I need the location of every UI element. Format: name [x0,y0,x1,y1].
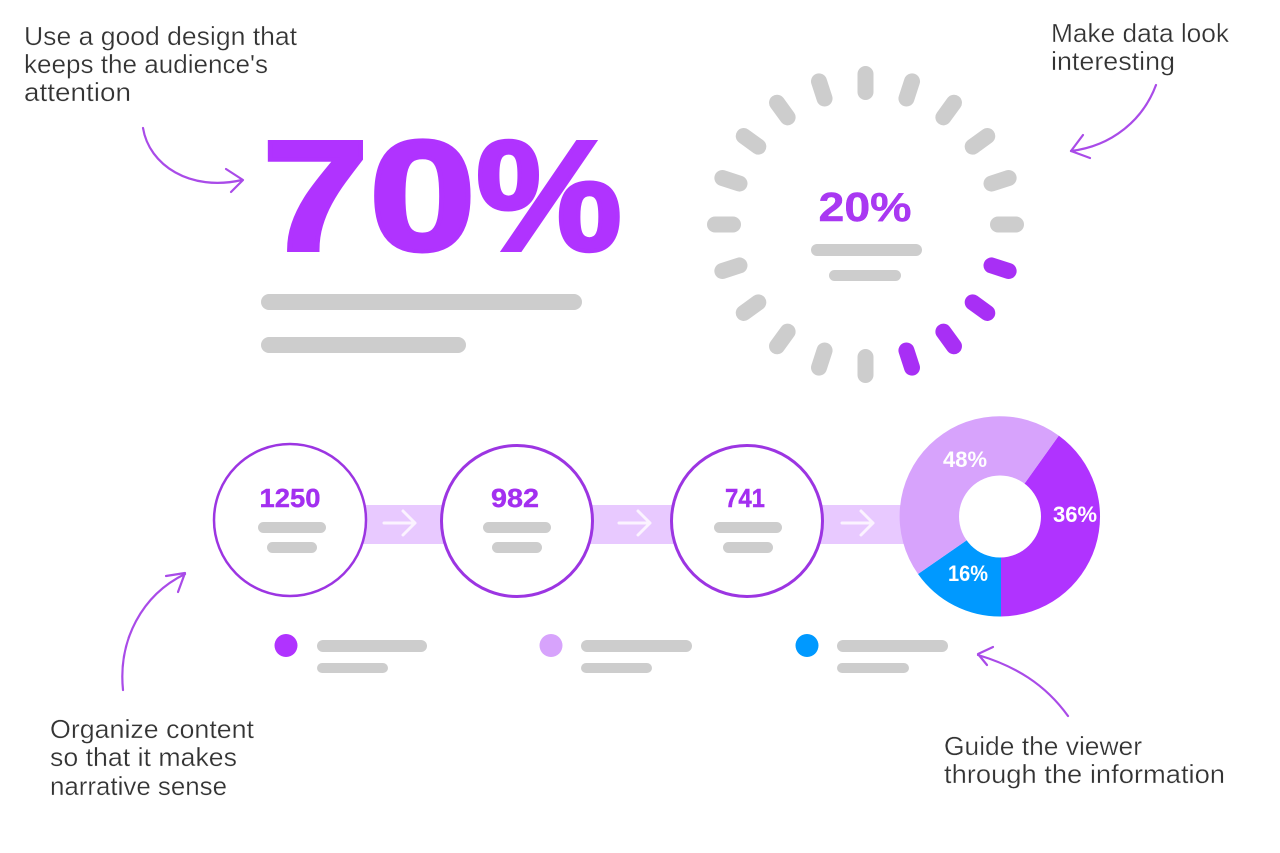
donut chart [900,416,1100,617]
legend: blue [796,634,948,673]
text placeholder: gauge [811,244,922,281]
text placeholder: 70% [261,294,582,353]
funnel step: 741: 741 [725,483,765,513]
gauge value: 20%: 20% [818,184,912,230]
note: organize content: Organize content [50,714,255,744]
gauge ticks grey [715,74,1016,375]
note: use a good design: attention [24,77,131,107]
big statistic: 70%: 70 [262,109,476,284]
note: make data look interesting: interesting [1051,46,1175,76]
funnel step: 1250: 1250 [260,483,320,513]
note: organize content [50,714,255,801]
big statistic: 70% [262,109,622,284]
donut labels: 36% [1053,502,1097,527]
note: use a good design: keeps the audience's [24,49,268,79]
note: make data look interesting: Make data look [1051,18,1230,48]
note: guide the viewer [944,731,1225,789]
note: make data look interesting [1051,18,1230,76]
legend: purple [274,634,427,673]
funnel step: 982: 982 [491,483,539,513]
note: organize content: narrative sense [50,771,227,801]
funnel step: 982 [442,446,592,596]
big statistic: 70%: % [476,109,622,284]
note: use a good design: Use a good design that [24,21,298,51]
arrow: to legend [978,647,1068,716]
connector arrows [384,511,873,535]
donut labels: 16% [948,561,988,586]
legend: lavender [540,634,692,673]
funnel step: 1250 [214,444,366,596]
donut labels: 48% [943,447,987,472]
note: guide the viewer: Guide the viewer [944,731,1142,761]
donut labels [943,447,1097,586]
note: organize content: so that it makes [50,742,237,772]
funnel step: 741 [672,446,822,596]
arrow: to 70 percent [143,128,243,192]
arrow: to gauge [1071,85,1156,158]
note: guide the viewer: through the information [944,759,1225,789]
note: use a good design [24,21,298,107]
funnel connector bands [360,505,910,544]
radial gauge: 20 percent [715,74,1016,375]
gauge ticks purple [906,265,1009,368]
arrow: to first funnel step [122,573,185,690]
